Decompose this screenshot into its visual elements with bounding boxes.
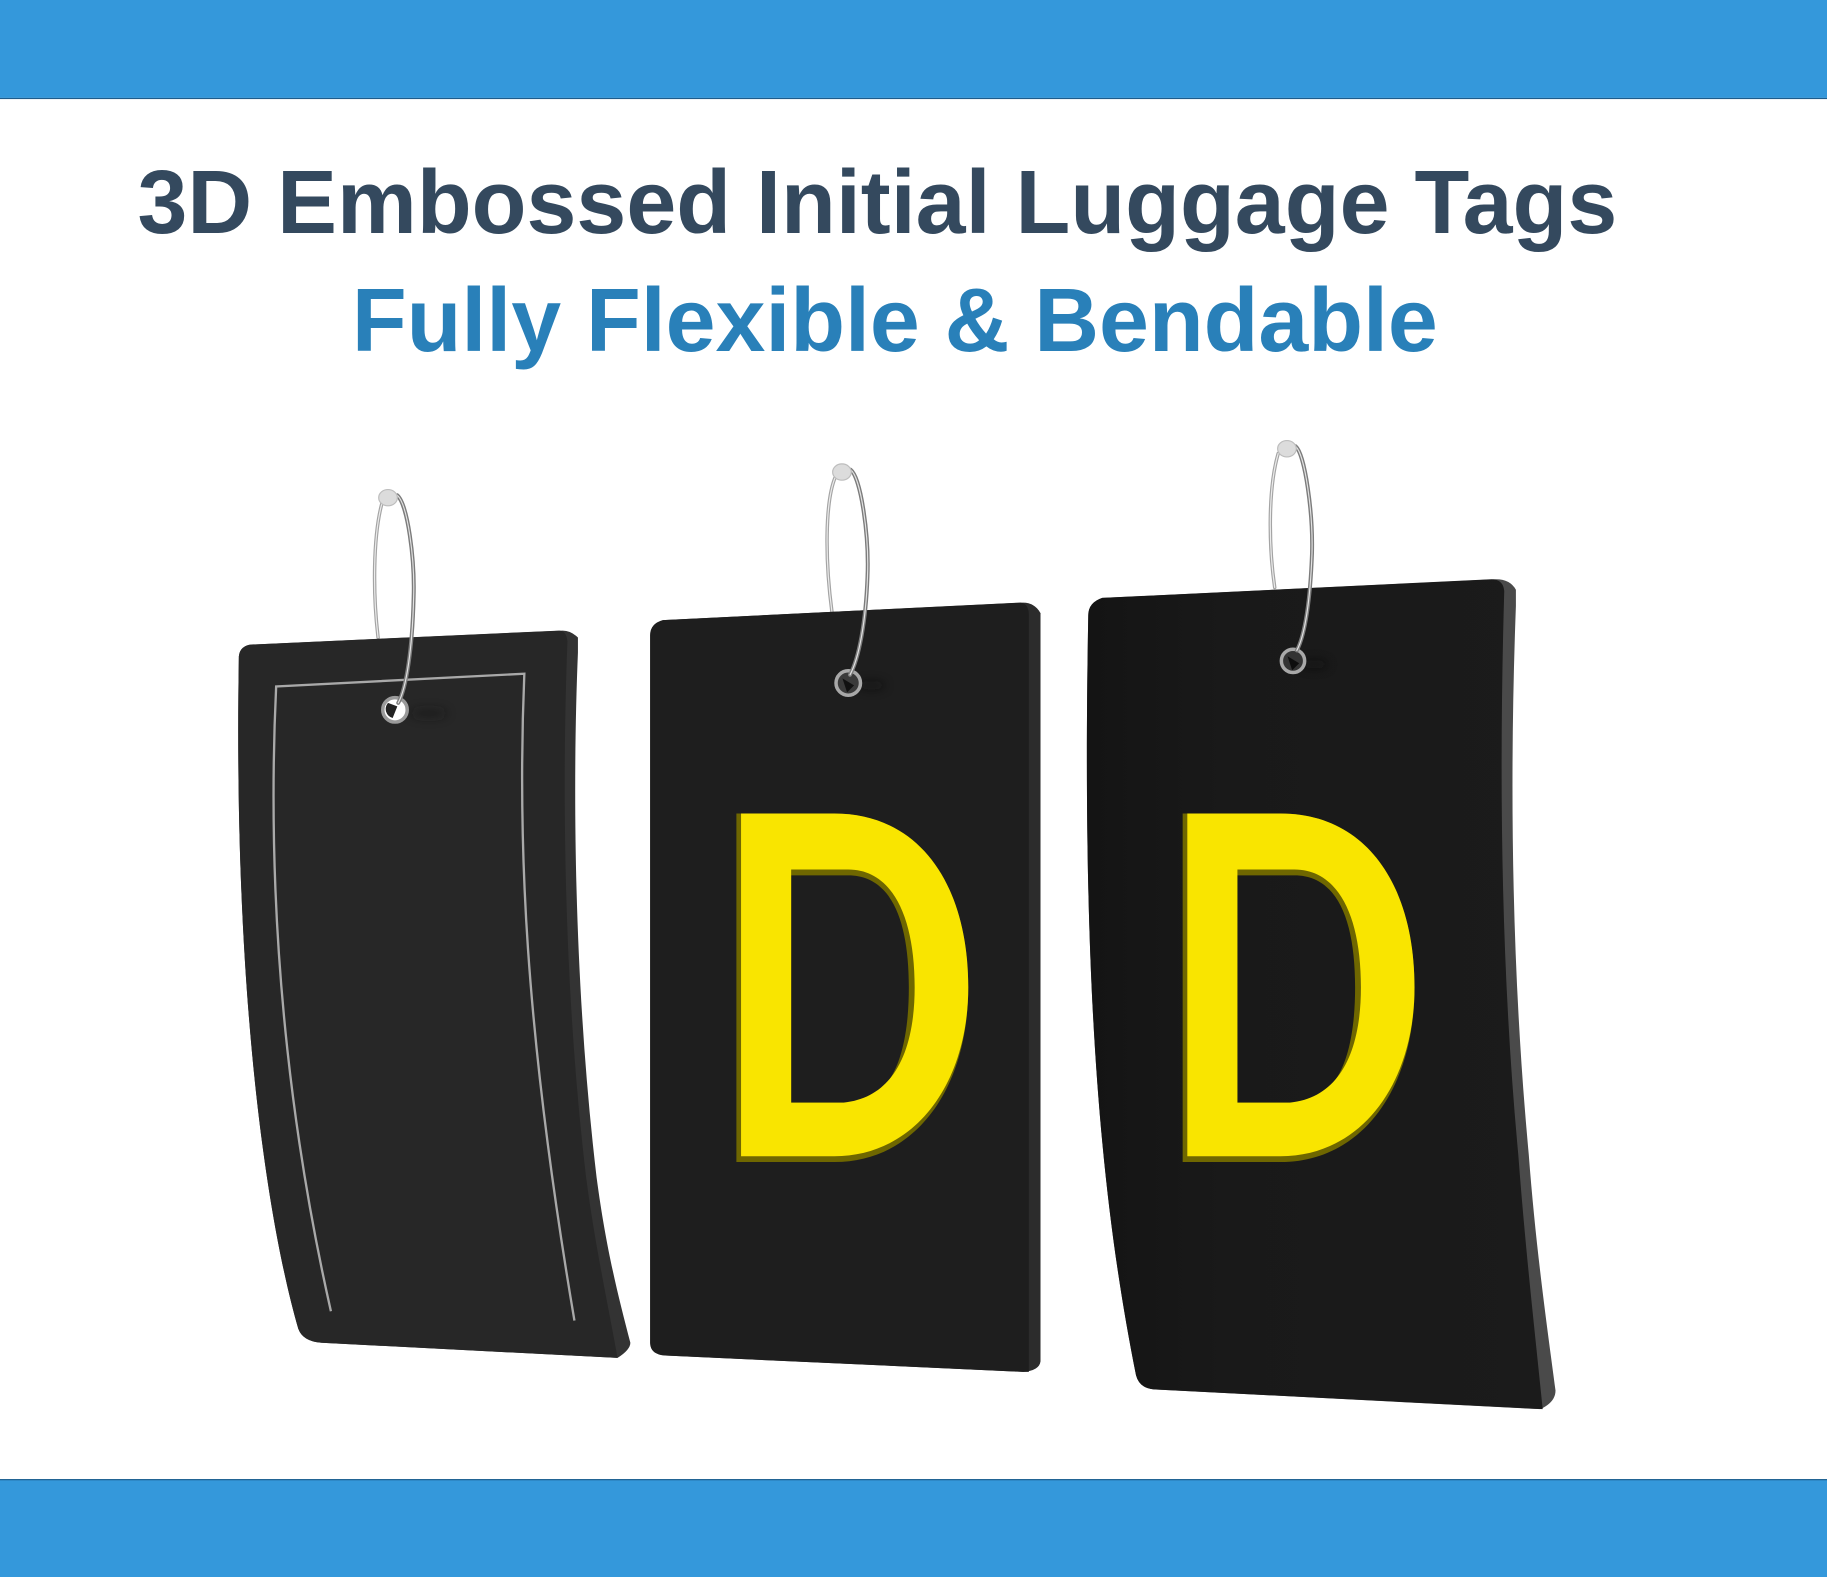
title: 3D Embossed Initial Luggage Tags: [137, 153, 1617, 253]
ring: [379, 490, 414, 703]
eyelet: [1281, 649, 1305, 673]
ring: [833, 464, 868, 675]
tag 2: front with embossed D: [650, 464, 1041, 1372]
tag 1: blank back with border line: [238, 490, 630, 1358]
silver inlay border: [274, 674, 574, 1321]
ring: [1278, 441, 1312, 650]
letter D: [736, 814, 968, 1162]
bottom blue band: [0, 1479, 1827, 1577]
subtitle: Fully Flexible & Bendable: [352, 271, 1438, 371]
top blue band: [0, 0, 1827, 99]
tag 3: front with embossed D, bent: [1087, 441, 1556, 1409]
letter D: [1183, 814, 1415, 1162]
eyelet: [836, 671, 860, 695]
eyelet: [383, 698, 407, 722]
